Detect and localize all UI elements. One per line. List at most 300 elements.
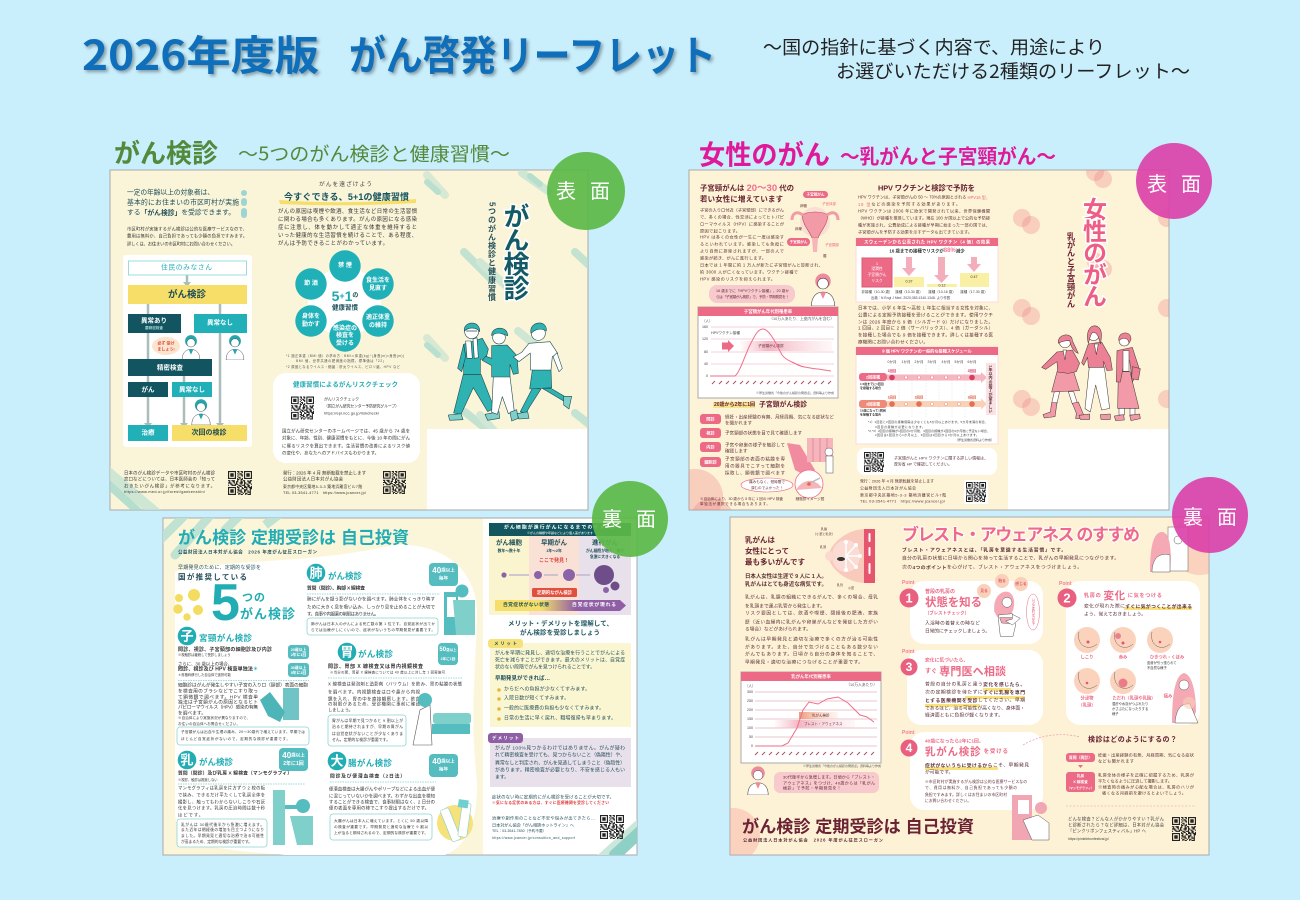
badge: 裏面 green: 裏 面	[602, 508, 656, 531]
exam steps: 強くなる月経前を避けるとよいでしょう。	[1102, 790, 1186, 796]
heading: breast awareness: ブレスト・アウェアネス のすすめ	[902, 524, 1140, 544]
exam steps: 内診	[706, 444, 715, 450]
panel: がん検診 back	[160, 505, 640, 870]
heading: how the exam works: 検診はどのようにするの？	[1088, 734, 1177, 744]
chart: vaccination schedule: 3か月	[928, 359, 936, 364]
callout: vaccination message	[709, 285, 795, 303]
badge: 表面 green	[547, 152, 625, 230]
pink ribbon info	[1068, 816, 1165, 841]
box: 次回の検診: 次回の検診	[192, 428, 226, 436]
box: 住民のみなさん	[128, 261, 246, 275]
chart: breast cancer by age: （人）	[745, 683, 756, 688]
point 2: （乳頭）	[1078, 702, 1096, 708]
exam steps: 視診	[706, 430, 715, 436]
chart: Sweden vaccine effect: 接種（17-30 歳）	[960, 289, 988, 294]
exam steps: 妊娠・出産経験の有無、月経周期、気になる症状	[1098, 752, 1195, 758]
section: colorectal screening: 40歳以上	[432, 756, 455, 766]
box: MHLW info	[857, 448, 997, 475]
intro paragraph: 乳がんは早期発見と適切な治療で多くの方が治る可能性	[745, 636, 878, 642]
five screenings intro: つの	[242, 592, 265, 604]
chart: vaccination schedule: 15歳になって1回目	[860, 408, 886, 412]
right column white	[483, 519, 636, 854]
diagram: breast anatomy: 乳管	[837, 582, 843, 587]
intro paragraph: リスク要因としては、飲酒や喫煙、閉経後の肥満、家族	[745, 610, 878, 616]
QR code	[864, 452, 885, 472]
panel: demerit	[488, 733, 631, 787]
cover title: がん検診	[500, 203, 530, 301]
chart: Sweden vaccine effect: 0.37	[906, 280, 912, 284]
woman 1	[1042, 335, 1085, 419]
chart: vaccination schedule: 3回目	[968, 394, 976, 400]
box: risk check	[273, 373, 420, 463]
QR code	[1172, 818, 1197, 840]
section: breast screening	[177, 748, 313, 847]
intro heading: 女性にとって	[745, 546, 789, 556]
chart: vaccination schedule: （厚生労働省資料より作成）	[955, 437, 994, 442]
box: risk check: がんリスクチェック	[324, 396, 359, 402]
section heading: 子宮頸がん検診: 20歳から2年に1回	[714, 401, 755, 408]
heading: がん検診	[114, 134, 510, 170]
oval: speech	[1026, 594, 1040, 630]
chart: vaccination schedule: 0か月	[888, 359, 896, 364]
heading: 女性のがん: 女性のがん	[699, 134, 830, 172]
icon: person reading	[192, 399, 210, 425]
point 2: 湿疹や水泡がつぶれたり	[1112, 701, 1148, 706]
chart: cervical cancer by age: （人）	[702, 318, 712, 323]
chart: vaccination schedule: 2回目	[915, 394, 923, 400]
point 2: しこり	[1081, 654, 1093, 660]
cervical cancer heading	[700, 182, 794, 204]
footnotes: *2 原因となるウイルス・細菌：肝炎ウイルス、ピロリ菌、HPV など	[286, 364, 401, 369]
cover subtitle: 乳がんと子宮頸がん	[1066, 231, 1076, 309]
Japan vaccine paragraph: 1 回目、2 回目に 2 価（サーバリックス）、4 価（ガーダシル）	[858, 324, 993, 332]
point 4: 40歳になったら2年に1回、	[925, 738, 984, 744]
diagram: cancer progression: がん細胞が増え、塊が	[586, 548, 624, 553]
section: cervical screening: 問診、視診及び HPV 検査単独法＊	[178, 666, 258, 672]
chart: vaccination schedule: *1）1回目と2回目の接種間隔は少なくとも5か月以上あけます。5か月未満の場合、	[868, 419, 988, 424]
QR code	[383, 472, 407, 493]
diagram: uterus: 子宮頸部	[825, 242, 839, 247]
diagram: breast anatomy: 乳腺	[821, 526, 828, 531]
intro text: 基本的にお住まいの市区町村が実施	[127, 198, 239, 206]
box: 精密検査	[128, 359, 212, 376]
point 2: 不自然な様子	[1147, 665, 1167, 670]
intro paragraph: があります。また、自分で気づけることもある数少ない	[745, 644, 878, 650]
point 4: にお問い合わせください。	[925, 798, 971, 803]
point 1: Point	[902, 580, 915, 586]
diagram: breast anatomy: （小葉と乳管）	[813, 531, 835, 536]
footer left text: 窓口などについては、日本医師会の「知って	[124, 476, 215, 482]
point 2: 変化が現れた際にすぐに気がつくことが出来る	[1084, 602, 1192, 610]
exam steps: を聞かれます	[725, 420, 752, 426]
footer left text	[124, 470, 216, 494]
exam steps: 問診	[706, 416, 715, 422]
five screenings intro	[173, 564, 295, 632]
intro heading	[745, 534, 806, 566]
chart: breast cancer by age: 乳がん検診	[812, 712, 830, 718]
box: がん	[128, 382, 168, 397]
box: がん検診	[128, 285, 247, 304]
box: risk check: 対象に、年齢、性別、健康習慣をもとに、今後 10 年の間にがん	[282, 434, 411, 442]
panel: merit: 状のない段階でがんを見つけられることです。	[495, 664, 595, 670]
section: stomach screening: しましょう。	[328, 708, 353, 714]
point 1: 触る	[998, 578, 1006, 583]
badge: 裏面 pink: 裏 面	[1183, 506, 1237, 529]
illustration: endoscopy	[413, 693, 471, 745]
chart: vaccination schedule: 1回目	[888, 394, 896, 400]
point 4: Point	[902, 730, 915, 736]
diagram: cancer progression: 数年〜数十年	[498, 548, 521, 553]
section: cervical screening: 宮頸がん検診	[199, 633, 252, 643]
diagram: uterus	[787, 191, 839, 258]
section: breast screening: 40歳以上	[282, 750, 305, 760]
diagram: 5+1 health habits: 感染症の	[333, 324, 357, 332]
diagram: 5+1 health habits: の維持	[369, 321, 387, 329]
point 4: ※市区町村が実施するがん検診は公的な医療サービスなの	[925, 779, 1027, 784]
section: cervical screening: お住いの自治体へお問合せください。	[178, 721, 240, 726]
chart: cervical cancer by age: HPVワクチン接種	[711, 330, 740, 335]
point 2: 痛み	[1164, 692, 1173, 700]
diagram: 5+1 health habits: 禁 煙	[338, 261, 352, 269]
panel: merit: がんを早期に発見し、適切な治療を行うことでがんによる	[495, 650, 625, 656]
diagram: 5+1 health habits: 検査を	[336, 331, 354, 339]
section: colorectal screening: 腸がん検診	[348, 758, 392, 768]
publisher info: 公益財団法人日本対がん協会	[860, 486, 916, 490]
diagram: cancer progression: がん細胞	[496, 538, 522, 546]
heading: merit and demerit: メリット・デメリットを理解して、	[508, 618, 613, 628]
intro paragraph	[745, 594, 878, 666]
section: breast screening: マンモグラフィは乳房を片方ずつ 2 枚の板	[178, 784, 266, 792]
section: colorectal screening: 毎年	[439, 766, 448, 772]
Japan vaccine paragraph: 療機関にお問い合わせください。	[858, 338, 928, 346]
exam steps: 子宮や卵巣の様子を触診して	[725, 442, 785, 448]
publisher info: 東京都中央区築地5-3-3 築地浜離宮ビル7階	[860, 492, 946, 498]
chart: cervical cancer by age: （10万人あたり、上皮内がんを含む）	[769, 316, 834, 321]
section: stomach screening: X 線検査は発泡剤と造影剤（バリウム）を飲み、胃の粘膜の状態	[328, 680, 463, 688]
panel: merit: 早期発見ができれば…	[495, 674, 550, 682]
chart: breast cancer by age: ブレスト・アウェアネス	[804, 721, 843, 726]
point 2: Point	[1059, 581, 1072, 587]
Japan vaccine paragraph: 公費による定期予防接種を受けることができます。使用ワクチ	[858, 312, 994, 318]
health habit paragraph	[278, 207, 418, 247]
Japan vaccine paragraph	[858, 304, 994, 346]
cervical cancer paragraph: 日本では 1 年間に約 1 万人が新たに子宮頸がんと診断され、	[700, 262, 823, 268]
note: subsidy	[700, 496, 783, 506]
chart: cervical cancer by age: 160	[702, 325, 708, 329]
panel: merit: 一般的に医療費の負担も少なくてすみます。	[504, 704, 604, 712]
section: colorectal screening: の検査が重要です。早期発見と適切な治療で 9 割以	[334, 824, 428, 829]
point 3	[900, 649, 1043, 725]
intro paragraph: がんでもあります。日頃から自分の身体を知ることで、	[745, 650, 878, 658]
section: cervical screening: ※自治体により実施状況が異なりますので、	[178, 715, 250, 720]
section: lung screening: 肺がんは日本人のがんによる死亡数の第 1 位です。自覚症状が出てか	[311, 621, 435, 626]
section: cervical screening	[177, 627, 309, 745]
section: lung screening: ために大きく息を吸い込み、しっかり息を止めることが大切で	[307, 604, 436, 610]
section: cervical screening: を検査用のブラシなどでこすり取っ	[178, 688, 258, 694]
Japan vaccine paragraph: を接種した場合でも 9 価を接種できます。詳しくは接種する医	[858, 332, 994, 338]
exam steps: なども聞かれます	[1098, 758, 1134, 764]
point 2: 2	[1063, 590, 1071, 606]
panel: demerit: 異常なしと判定され、がんを見逃してしまうこと（偽陰性）	[495, 760, 625, 766]
exam steps: 乳房全体の様子を正確に把握するため、乳房が	[1098, 772, 1195, 778]
point 1: 感じる	[1015, 581, 1027, 586]
section: cervical screening: 子宮頸がんは出血や生理の痛み、20～30歳代で増えています。早期では	[181, 729, 305, 734]
point 3: Point	[902, 649, 915, 655]
diagram: cancer progression: 自覚症状が現れる	[572, 601, 616, 608]
box: 異常あり: 異常あり	[141, 316, 167, 324]
callout: awareness: 30代後半から急増します。日頃から「ブレスト・	[783, 774, 875, 780]
footer left text: https://www.med.or.jp/forest/gankenshin/	[124, 490, 206, 494]
intro small text: 市区町村が実施するがん検診は公的な医療サービスなので、	[127, 226, 247, 232]
diagram: 5+1 health habits	[295, 250, 394, 352]
awareness description: 自分の乳房の状態に日頃から関心を持って生活することで、乳がんの早期発見につながります。	[902, 554, 1119, 562]
exam steps: 確認します	[725, 448, 748, 454]
point 1: いつもと変わりないかな？	[1031, 598, 1035, 626]
intro paragraph: る場合）などがあげられます。	[745, 626, 811, 632]
panel: merit: 日常の生活に早く戻れ、職場復帰も早まります。	[504, 714, 616, 722]
section: cervical screening: 2年に1回	[291, 652, 307, 657]
diagram: breast anatomy	[813, 526, 875, 590]
illustration: examination chair	[787, 438, 833, 478]
chart: breast cancer by age: 200	[747, 708, 753, 712]
section: lung screening	[307, 563, 475, 635]
chart: Sweden vaccine effect: 非接種（10-30 歳）	[862, 289, 892, 294]
section: breast screening: 乳	[180, 752, 194, 768]
section: cervical screening: 30歳以上	[291, 665, 307, 670]
chart: vaccination schedule: 2回接種	[866, 374, 880, 380]
decorative pink circles	[689, 170, 1169, 510]
point 1: （ブレストチェック）	[925, 610, 969, 616]
point 2: かさぶたになったりする	[1112, 706, 1148, 711]
note: regular screening: 症状のない時に定期的にがん検診を受けることが大切です。	[492, 794, 614, 800]
section: cervical screening: 子	[180, 628, 194, 644]
health habit paragraph: いった健康的な生活習慣を続けることで、ある程度、	[278, 231, 417, 239]
health habit heading: 今すぐできる、5+1の健康習慣	[284, 191, 409, 202]
diagram: uterus: 膣	[823, 253, 827, 258]
point 1: 日常的にチェックしましょう。	[925, 628, 990, 634]
point 2: ひきつれ・くぼみ	[1150, 654, 1185, 660]
point 4: 4	[906, 741, 913, 755]
chart: breast cancer by age: 300	[747, 690, 753, 694]
callout: vaccination message: らは「子宮頸がん検診」で、予防・早期発見を！	[716, 294, 789, 299]
chart: vaccination schedule: 2回目	[968, 368, 976, 373]
section: lung screening: 肺	[309, 566, 323, 580]
intro paragraph bold: 日本人女性は生涯で 9 人に 1 人。	[745, 572, 827, 580]
illustration: chest xray	[444, 584, 475, 635]
bubble: comment: 済むのでよかった！	[751, 485, 783, 490]
corner stripes	[598, 820, 637, 855]
section: colorectal screening	[328, 752, 473, 842]
runner 2	[482, 328, 518, 421]
chart: breast cancer by age: 50	[749, 735, 753, 739]
box: risk check: 国立がん研究センターのホームページでは、45 歳から 74 歳を	[282, 428, 410, 434]
hotline info: 治療や副作用のことなど不安や悩みが出てきたら…	[492, 814, 595, 822]
badge: 表面 pink	[1136, 143, 1212, 219]
exam steps: 乳房	[1077, 773, 1084, 778]
HPV paragraph: HPV ワクチンは 2006 年に欧米で開発されて以来、世界保健機関	[858, 208, 990, 214]
HPV paragraph: 種が実施され、公費助成による接種が早期に始まった一部の国では、	[858, 222, 990, 228]
cervical cancer paragraph: より自然に排除されますが、一部の人で	[700, 248, 784, 254]
point 2: 乳房の 変化 に気をつける	[1084, 589, 1162, 602]
health habit heading	[279, 180, 416, 205]
white lower-right area	[1008, 429, 1168, 510]
exam steps: （マンモグラフィ）	[1067, 785, 1094, 790]
exam steps: 細胞診	[704, 458, 718, 466]
diagram: 5+1 health habits: 見直す	[369, 284, 387, 292]
chart: vaccination schedule: 2回目は1回目から1か月以上、3回目は2回目から3か月以上あけます。	[875, 432, 979, 437]
subtitle: お選びいただける2種類のリーフレット～	[836, 58, 1190, 84]
diagram: 5+1 health habits: 健康習慣	[332, 302, 358, 312]
cervical cancer paragraph: 原因で起こります。	[700, 228, 740, 234]
publisher info	[860, 478, 946, 504]
illustration: self-check woman	[994, 592, 1020, 636]
section: lung screening: す。食事や内服薬の制限はありません。	[307, 610, 379, 618]
chart: vaccination schedule: 5か月	[955, 359, 963, 364]
chart: vaccination schedule: 2か月	[915, 359, 923, 364]
section: breast screening: で挟み、できるだけ平たくして乳房全体を	[178, 792, 265, 798]
exam steps: 採取し、顕微鏡で調べます	[725, 470, 786, 476]
pink ribbon info: 「ピンクリボンフェスティバル」HP へ	[1068, 828, 1147, 834]
box: risk check: に罹るリスクを算出できます。生活習慣の改善によるリスク値	[282, 442, 411, 450]
point 3: であるほど、治る可能性が高くなり、身体面・	[925, 704, 1025, 712]
chart: vaccination schedule: 1回目	[888, 368, 896, 373]
diagram: cancer progression: 自覚症状がない状態	[503, 601, 549, 608]
illustration: three women	[1042, 326, 1140, 421]
illustration: mammography	[273, 790, 313, 845]
heading: がん検診: がん検診	[114, 134, 218, 170]
chart: Sweden vaccine effect: 接種（10-16 歳）	[928, 289, 956, 294]
dashed arrow	[1023, 735, 1080, 745]
panel: 女性のがん back	[730, 516, 1210, 856]
panel: demerit: がんが 100%見つかるわけではありません。がんが疑わ	[495, 744, 625, 752]
chart source: ※厚生労働省「今後のがん検診の問題点」資料等より作成	[803, 763, 881, 768]
white lower-right area	[427, 429, 588, 510]
badge: 裏面 pink	[1172, 477, 1248, 553]
chart: vaccination schedule: を接種する場合	[860, 412, 881, 416]
section: stomach screening: 2年に1回	[441, 656, 456, 661]
intro small text: 詳しくは、お住まいの市区町村にお問い合わせください。	[127, 240, 235, 248]
intro paragraph: 早期発見・適切な治療につなげることが重要です。	[745, 658, 863, 666]
subtitle	[763, 34, 1190, 84]
panel: がん検診 front	[105, 170, 590, 525]
diagram: cancer progression: 急激に大きくなる	[590, 554, 620, 559]
panel: demerit: れて精密検査を受けても、見つからないこと（偽陽性）や、	[495, 752, 625, 758]
section: cervical screening: 20歳以上	[291, 647, 307, 652]
diagram: uterus: 卵管	[800, 203, 808, 208]
section: breast screening: ました。早期発見と適切な治療で治る可能性	[181, 833, 264, 838]
section: cervical screening: パピローマウイルス（HPV）感染の有無	[178, 704, 258, 710]
corner circles	[730, 546, 1209, 855]
pink ribbon info: https://pinkribbonfestival.jp/	[1068, 837, 1109, 841]
point 1: 普段の乳房の	[925, 588, 955, 595]
diagram: uterus: 子宮頸がん	[807, 192, 825, 196]
section: stomach screening: 胃がんは早期で見つかると 9 割以上が	[332, 718, 403, 723]
chart: Sweden vaccine effect: 接種（10-30 歳）	[895, 289, 923, 294]
chart: cervical cancer by age: 子宮頸がん検診	[758, 343, 784, 348]
main title: がん啓発リーフレット	[349, 22, 716, 82]
callout: awareness: アウェアネス」をつづけ、40歳からは「乳がん	[783, 780, 875, 786]
box: 異常なし 2	[172, 382, 212, 397]
icon: female doctor	[811, 274, 835, 306]
section: breast screening: ほどです。	[178, 812, 203, 818]
section: colorectal screening: 便の表面を専用の棒でこすり提出するだけです。	[329, 804, 429, 812]
main title	[82, 22, 716, 82]
chart: Sweden vaccine effect	[856, 238, 998, 302]
chart: cervical cancer by age	[698, 307, 838, 398]
chart: breast cancer by age	[741, 672, 881, 763]
box: 次回の検診	[172, 425, 247, 441]
chart: Sweden vaccine effect: 浸潤性	[871, 266, 883, 271]
diagram: cancer progression: 進行がん	[592, 538, 618, 546]
section: stomach screening: を調べます。内視鏡検査は口や鼻から内視	[328, 688, 421, 696]
footer left text: 日本のがん検診データや市区町村のがん検診	[124, 470, 216, 476]
runner 3	[513, 323, 572, 419]
intro paragraph bold: 乳がんはとても身近な病気です。	[745, 580, 827, 588]
section: cervical screening: さらに、30 歳以上の場合、	[178, 660, 232, 668]
section: cervical screening: 細胞診はがんが発生しやすい子宮の入り口（頸部）表面の細胞	[178, 682, 308, 688]
footnotes: *1 適正体重（BMI 値）の求め方：BMI＝体重(kg)÷(身長(m)×身長(m))	[286, 353, 404, 358]
five screenings intro: 早期発見のために、定期的な受診を	[178, 564, 261, 571]
point 4: 症状がないうちに受けるからこそ、早期発見	[925, 762, 1029, 768]
illustration: mirror	[1150, 527, 1188, 572]
section: lung screening: 40歳以上	[432, 566, 455, 574]
section: lung screening: がん検診	[328, 571, 362, 581]
exam steps: 子宮頸部の状態を目で見て確認します	[725, 430, 802, 436]
diagram: cancer progression: 1年〜2年	[546, 548, 562, 553]
diagram: uterus: 卵巣	[795, 226, 802, 231]
QR code	[228, 472, 253, 494]
point 2: 分泌物	[1081, 694, 1094, 702]
point 4: で、費用は無料か、自己負担であっても少額の	[925, 785, 1017, 790]
icon: doctor	[182, 335, 200, 360]
publisher info: 東京都中央区築地5-3-3 築地浜離宮ビル7階	[283, 484, 362, 489]
section: colorectal screening: 問診及び便潜血検査（2日法）	[330, 772, 405, 780]
section: breast screening: 乳がんは 30歳代後半から急激に増えます。	[181, 822, 264, 827]
section: breast screening: 質問（問診）及び乳房 X 線検査（マンモグラフィ）	[178, 770, 292, 776]
diagram: 5+1 health habits: 受ける	[336, 339, 354, 347]
chart: Sweden vaccine effect: 0.47	[970, 275, 978, 279]
hotline info	[492, 814, 595, 840]
illustration: mammography	[1012, 795, 1049, 840]
exam steps: 質問（問診）	[1069, 755, 1092, 760]
chart: vaccination schedule: 6か月	[968, 359, 976, 364]
point 3: 次の定期検診を待たずにすぐに乳腺を専門	[925, 688, 1025, 696]
point 2	[1058, 581, 1200, 725]
box: risk check: 健康習慣によるがんリスクチェック	[293, 380, 398, 388]
diagram: 5+1 health habits: 動かす	[302, 320, 320, 328]
point 4: 負担ですみます。詳しくはお住まいの市区町村	[925, 792, 1007, 797]
box: risk check: の変化や、あなたへのアドバイスもわかります。	[282, 450, 379, 456]
exam steps: 子宮頸部の表面の粘膜を専	[725, 456, 786, 462]
section: stomach screening: は自覚症状がないことが少なくありま	[332, 731, 403, 736]
section heading: 子宮頸がん検診: 子宮頸がん検診	[759, 400, 807, 408]
publisher info: 発行：2026 年 4 月 無断転載を禁止します	[860, 478, 934, 484]
section: stomach screening: 50歳以上	[439, 647, 457, 653]
diagram: 5+1 health habits: 適正体重	[366, 313, 390, 321]
section: stomach screening: ※当分の間、胃部 X 線検査については 40 歳以上に対し年 1 回実施可	[330, 670, 446, 674]
section: breast screening: 化を見つけます。乳房の圧迫時間は数十秒	[178, 804, 266, 812]
panel: demerit: があります。精密検査が必要となり、不安を感じる人もい	[495, 766, 625, 774]
section: colorectal screening: 上が治ると期待されるので、定期的な検診が重要です。	[334, 830, 428, 835]
intro text: する「がん検診」を受診できます。	[127, 208, 235, 216]
intro paragraph: 乳がんは、乳腺の組織にできるがんで、多くの場合、母乳	[745, 594, 878, 600]
cover subtitle: 5つのがん検診と健康習慣	[488, 202, 496, 302]
box: 治療	[128, 425, 168, 441]
callout: vaccination message: 16 歳までに「HPVワクチン接種」、20 歳か	[716, 288, 789, 293]
intro text: 一定の年齢以上の対象者は、	[127, 188, 214, 196]
chart: vaccination schedule: 4か月	[942, 359, 950, 364]
chart: Sweden vaccine effect: スウェーデンから公表された HPV ワクチン（4 価）の効果	[864, 238, 991, 246]
